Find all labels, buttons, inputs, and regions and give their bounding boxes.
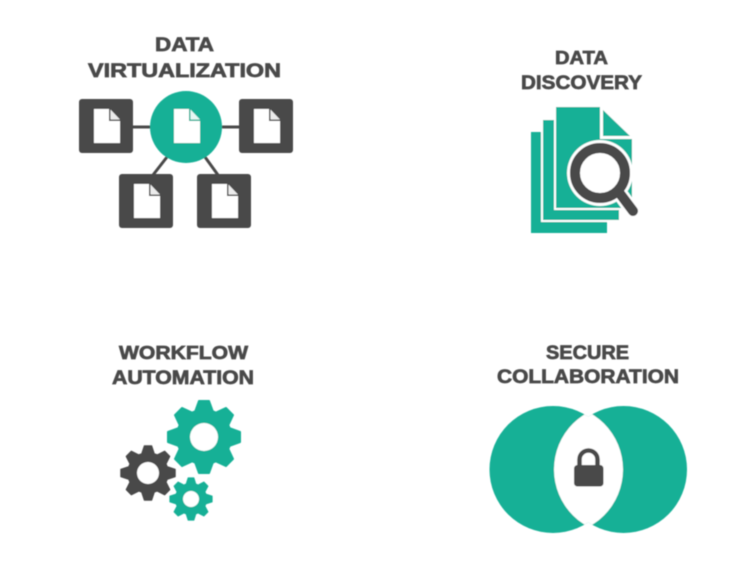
icon: large teal gear: [168, 401, 240, 473]
heading: data virtualization: [88, 34, 281, 82]
infographic canvas: [78, 36, 688, 534]
icon: bottom left document box: [119, 174, 173, 228]
panel: secure collaboration: [490, 343, 687, 534]
heading: data discovery: DISCOVERY: [521, 73, 642, 94]
heading: workflow automation: [112, 342, 254, 389]
heading: data virtualization: VIRTUALIZATION: [88, 60, 281, 82]
panel: data virtualization: [79, 34, 293, 228]
icon: central document circle: [150, 91, 222, 163]
icon: stacked documents: [531, 105, 634, 233]
panel: data discovery: [521, 48, 642, 233]
panel: workflow automation: [112, 342, 254, 520]
heading: data discovery: DATA: [555, 48, 608, 68]
icon: left document box: [79, 99, 133, 153]
heading: workflow automation: WORKFLOW: [119, 342, 249, 363]
connector lines: [133, 127, 239, 175]
icon: dark gear: [121, 446, 175, 500]
heading: secure collaboration: SECURE: [546, 343, 629, 364]
icon: small teal gear: [170, 478, 212, 520]
heading: workflow automation: AUTOMATION: [112, 368, 254, 389]
page content: [79, 34, 687, 534]
icon: magnifying glass: [567, 140, 633, 211]
icon: padlock: [574, 450, 604, 486]
heading: secure collaboration: COLLABORATION: [497, 366, 679, 388]
icon: right document box: [239, 99, 293, 153]
heading: data discovery: [521, 48, 642, 94]
heading: secure collaboration: [497, 343, 679, 388]
icon: overlapping circles: [490, 404, 687, 534]
heading: data virtualization: DATA: [155, 34, 214, 56]
icon: bottom right document box: [197, 174, 251, 228]
